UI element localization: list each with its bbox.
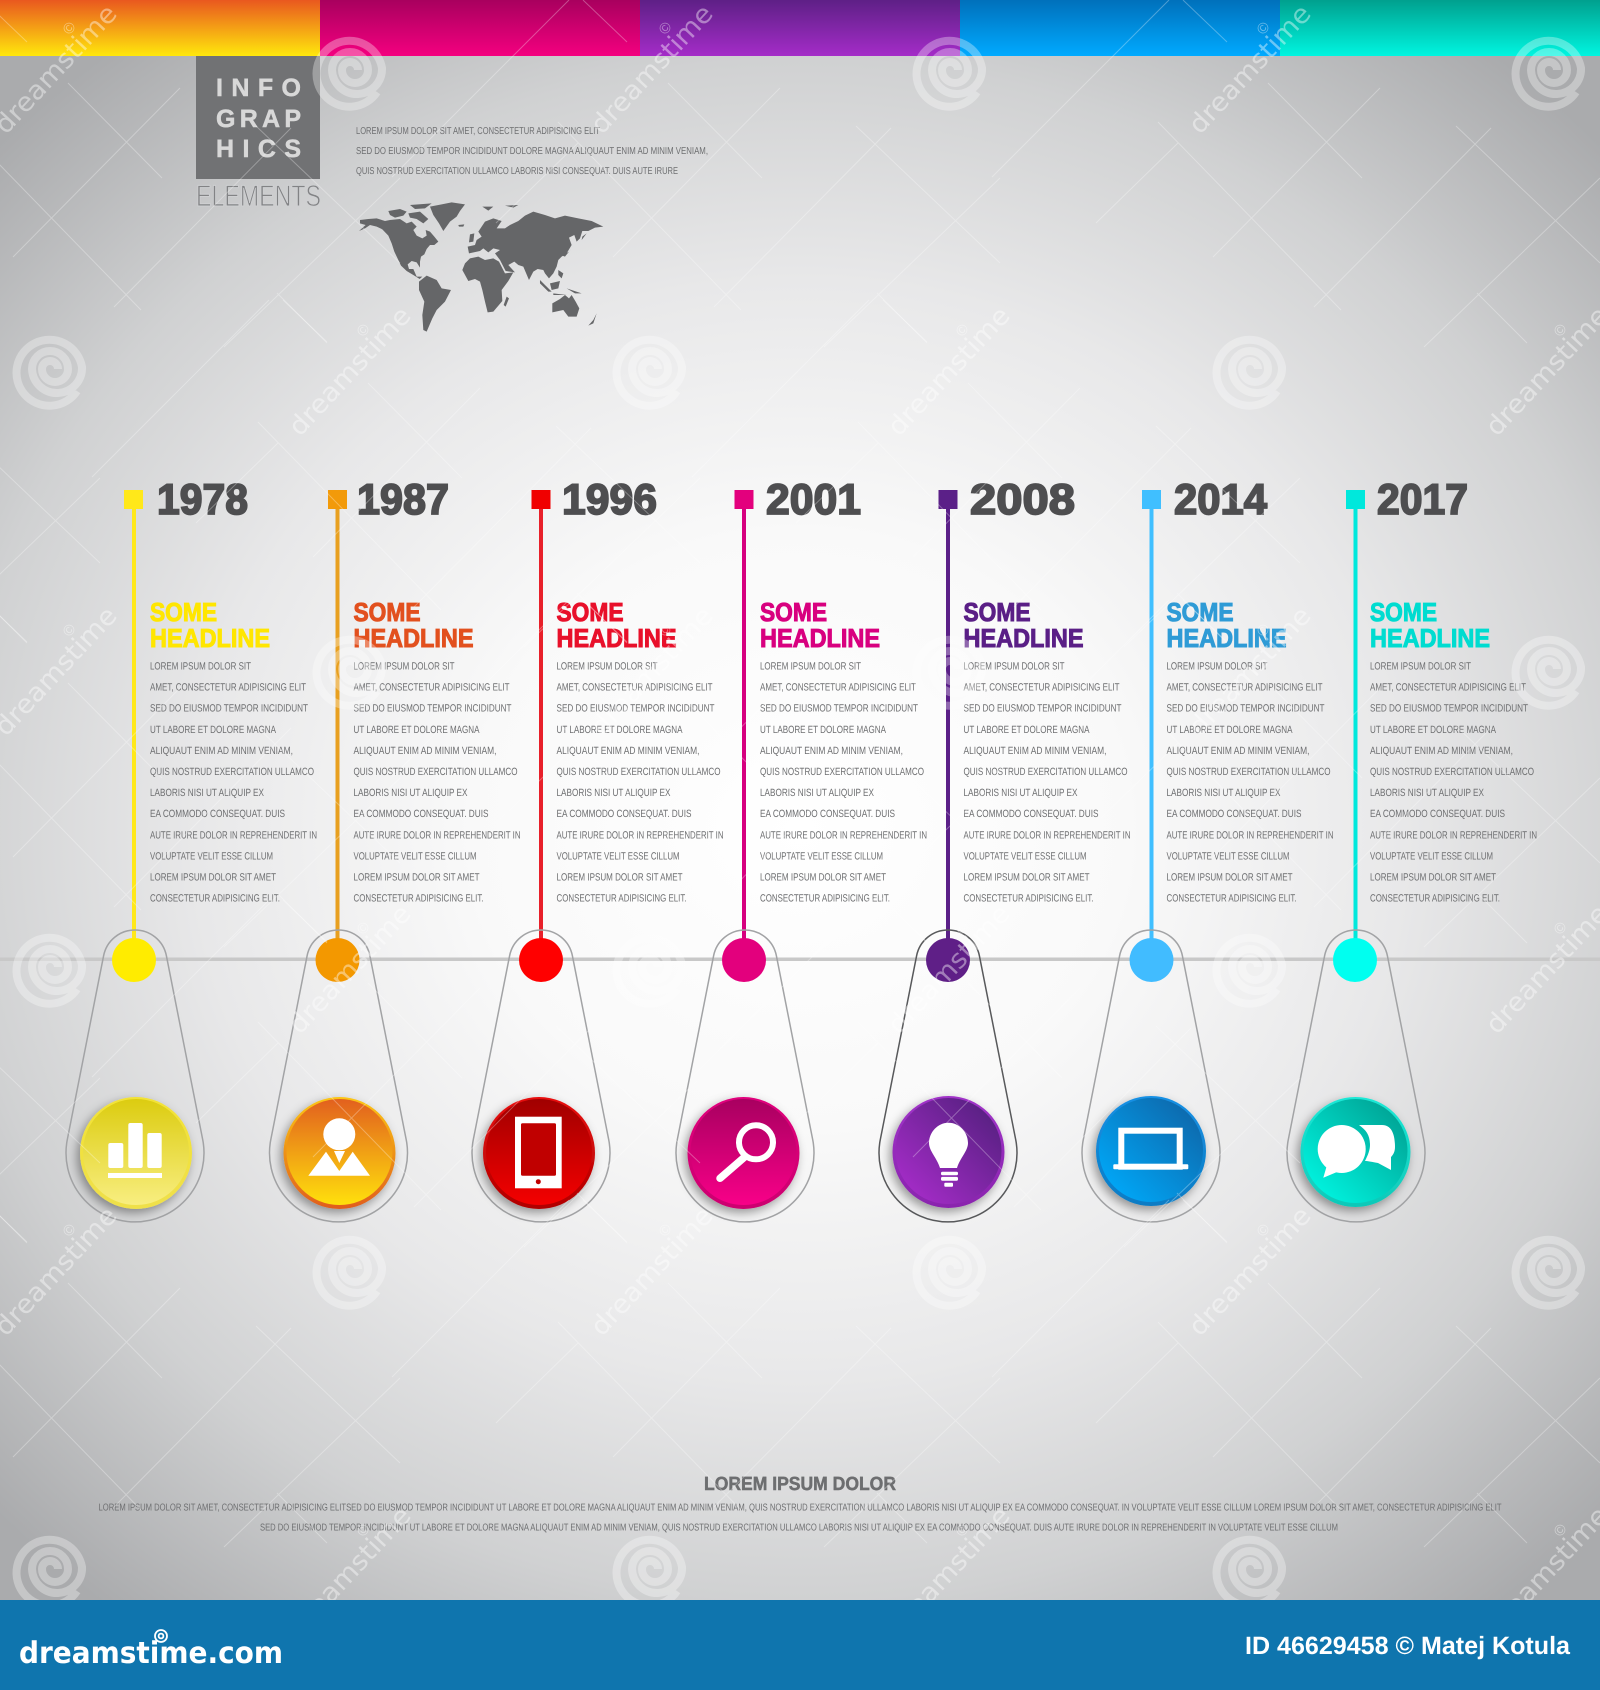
watermark layer: dreamstime xyxy=(283,1501,418,1642)
icon: magnifier xyxy=(720,1125,773,1178)
teardrop outline xyxy=(879,930,1017,1222)
body text: EA COMMODO CONSEQUAT. DUIS xyxy=(150,808,285,820)
timeline dot xyxy=(112,938,156,982)
headline: HEADLINE xyxy=(556,623,676,653)
body text: LABORIS NISI UT ALIQUIP EX xyxy=(1370,787,1484,799)
watermark layer: dreamstime xyxy=(283,899,418,1040)
bottom text block xyxy=(98,1474,1502,1534)
marker and stem xyxy=(938,490,958,941)
footer bar xyxy=(0,1600,1600,1690)
icon: chat bubbles xyxy=(1318,1125,1395,1178)
body text xyxy=(354,660,520,905)
body text: AUTE IRURE DOLOR IN REPREHENDERIT IN xyxy=(354,829,520,841)
watermark layer: © xyxy=(655,1221,675,1240)
marker and stem xyxy=(734,490,754,941)
body text: AMET, CONSECTETUR ADIPISICING ELIT xyxy=(964,682,1120,694)
body text: UT LABORE ET DOLORE MAGNA xyxy=(556,724,682,736)
column: 1987 xyxy=(270,476,520,1222)
watermark layer: © xyxy=(952,321,972,340)
watermark layer: © xyxy=(655,19,675,38)
marker and stem xyxy=(532,490,550,941)
marker and stem xyxy=(1142,490,1161,941)
body text: SED DO EIUSMOD TEMPOR INCIDIDUNT xyxy=(1370,703,1528,715)
button xyxy=(1096,1096,1206,1206)
body text: AUTE IRURE DOLOR IN REPREHENDERIT IN xyxy=(1166,829,1334,841)
marker and stem xyxy=(1346,490,1365,941)
headline: SOME xyxy=(1166,597,1234,627)
body text: UT LABORE ET DOLORE MAGNA xyxy=(150,724,276,736)
body text: ALIQUAUT ENIM AD MINIM VENIAM, xyxy=(1370,745,1513,757)
body text: SED DO EIUSMOD TEMPOR INCIDIDUNT xyxy=(964,703,1122,715)
body text xyxy=(964,660,1130,905)
body text: QUIS NOSTRUD EXERCITATION ULLAMCO xyxy=(760,766,924,778)
body text: UT LABORE ET DOLORE MAGNA xyxy=(1166,724,1292,736)
teardrop outline xyxy=(66,930,204,1222)
body text: EA COMMODO CONSEQUAT. DUIS xyxy=(1370,808,1505,820)
body text: AMET, CONSECTETUR ADIPISICING ELIT xyxy=(354,682,510,694)
body text: AUTE IRURE DOLOR IN REPREHENDERIT IN xyxy=(1370,829,1537,841)
footer bar: dreamstime.com xyxy=(19,1636,283,1671)
headline xyxy=(556,597,676,653)
watermark layer: © xyxy=(1253,19,1273,38)
body text: LOREM IPSUM DOLOR SIT xyxy=(354,660,455,672)
body text: QUIS NOSTRUD EXERCITATION ULLAMCO xyxy=(1370,766,1534,778)
teardrop outline xyxy=(1082,930,1220,1222)
body text: AUTE IRURE DOLOR IN REPREHENDERIT IN xyxy=(760,829,927,841)
body text: LOREM IPSUM DOLOR SIT AMET xyxy=(1370,872,1496,884)
body text: LOREM IPSUM DOLOR SIT AMET xyxy=(760,872,886,884)
body text: VOLUPTATE VELIT ESSE CILLUM xyxy=(1166,850,1290,862)
icon: laptop xyxy=(1113,1131,1188,1169)
body text: QUIS NOSTRUD EXERCITATION ULLAMCO xyxy=(354,766,518,778)
teardrop outline xyxy=(472,930,610,1222)
body text: AUTE IRURE DOLOR IN REPREHENDERIT IN xyxy=(964,829,1130,841)
watermark layer: dreamstime xyxy=(1183,0,1318,140)
teardrop outline xyxy=(270,930,408,1222)
body text: ALIQUAUT ENIM AD MINIM VENIAM, xyxy=(150,745,293,757)
body text: CONSECTETUR ADIPISICING ELIT. xyxy=(964,893,1094,905)
watermark layer: dreamstime xyxy=(585,1201,720,1342)
watermark layer: © xyxy=(1550,919,1570,938)
headline xyxy=(354,597,474,653)
watermark layer: dreamstime xyxy=(882,899,1017,1040)
body text: UT LABORE ET DOLORE MAGNA xyxy=(1370,724,1496,736)
body text: AMET, CONSECTETUR ADIPISICING ELIT xyxy=(150,682,306,694)
watermark layer: © xyxy=(1253,621,1273,640)
body text: ALIQUAUT ENIM AD MINIM VENIAM, xyxy=(1166,745,1310,757)
body text: SED DO EIUSMOD TEMPOR INCIDIDUNT xyxy=(354,703,512,715)
watermark layer: © xyxy=(59,621,79,640)
body text xyxy=(150,660,317,905)
body text: VOLUPTATE VELIT ESSE CILLUM xyxy=(964,850,1086,862)
timeline dot xyxy=(1333,938,1377,982)
timeline dot xyxy=(519,938,563,982)
body text: LOREM IPSUM DOLOR SIT AMET xyxy=(150,872,276,884)
body text: CONSECTETUR ADIPISICING ELIT. xyxy=(150,893,280,905)
world map xyxy=(359,202,603,332)
headline: SOME xyxy=(1370,597,1437,627)
watermark layer: © xyxy=(59,19,79,38)
body text: CONSECTETUR ADIPISICING ELIT. xyxy=(1166,893,1296,905)
year 1987: 1987 xyxy=(357,476,449,524)
headline: HEADLINE xyxy=(354,623,474,653)
timeline dot xyxy=(1130,938,1174,982)
watermark layer: © xyxy=(353,321,373,340)
body text: ALIQUAUT ENIM AD MINIM VENIAM, xyxy=(760,745,903,757)
bottom text block: LOREM IPSUM DOLOR xyxy=(704,1474,896,1495)
body text: LOREM IPSUM DOLOR SIT AMET xyxy=(1166,872,1293,884)
body text: SED DO EIUSMOD TEMPOR INCIDIDUNT xyxy=(1166,703,1325,715)
watermark layer: dreamstime xyxy=(585,601,720,742)
button xyxy=(284,1097,396,1209)
body text: SED DO EIUSMOD TEMPOR INCIDIDUNT xyxy=(760,703,918,715)
column: 1978 xyxy=(66,476,317,1222)
body text: QUIS NOSTRUD EXERCITATION ULLAMCO xyxy=(150,766,314,778)
headline xyxy=(1166,597,1286,653)
body text: LABORIS NISI UT ALIQUIP EX xyxy=(556,787,670,799)
logo: infographics elements: GRAP xyxy=(216,105,301,133)
headline xyxy=(760,597,880,653)
logo: infographics elements xyxy=(196,56,321,213)
icon: person xyxy=(308,1118,370,1176)
watermark layer: dreamstime xyxy=(585,0,720,140)
body text: LOREM IPSUM DOLOR SIT xyxy=(150,660,251,672)
intro text block: LOREM IPSUM DOLOR SIT AMET, CONSECTETUR ADIPISICING ELIT xyxy=(356,126,600,137)
watermark layer: © xyxy=(655,621,675,640)
watermark layer: dreamstime xyxy=(1183,601,1318,742)
column: 2001 xyxy=(676,476,927,1222)
watermark layer: © xyxy=(952,919,972,938)
body text: AUTE IRURE DOLOR IN REPREHENDERIT IN xyxy=(150,829,317,841)
button xyxy=(688,1097,800,1209)
body text: AMET, CONSECTETUR ADIPISICING ELIT xyxy=(1166,682,1323,694)
body text: ALIQUAUT ENIM AD MINIM VENIAM, xyxy=(354,745,496,757)
watermark layer: dreamstime xyxy=(882,1501,1017,1642)
headline: HEADLINE xyxy=(760,623,880,653)
body text xyxy=(556,660,724,905)
headline: HEADLINE xyxy=(1370,623,1490,653)
body text: LOREM IPSUM DOLOR SIT AMET xyxy=(556,872,683,884)
column: 2014 xyxy=(1082,476,1334,1222)
body text: LABORIS NISI UT ALIQUIP EX xyxy=(1166,787,1280,799)
headline: HEADLINE xyxy=(1166,623,1286,653)
teardrop outline xyxy=(676,930,814,1222)
body text: AMET, CONSECTETUR ADIPISICING ELIT xyxy=(1370,682,1526,694)
body text: UT LABORE ET DOLORE MAGNA xyxy=(354,724,480,736)
watermark layer: © xyxy=(952,1521,972,1540)
body text: LABORIS NISI UT ALIQUIP EX xyxy=(150,787,264,799)
marker and stem xyxy=(124,490,143,941)
body text xyxy=(1370,660,1537,905)
body text: AMET, CONSECTETUR ADIPISICING ELIT xyxy=(760,682,916,694)
column: 1996 xyxy=(472,476,724,1222)
body text: QUIS NOSTRUD EXERCITATION ULLAMCO xyxy=(556,766,720,778)
timeline dot xyxy=(316,938,360,982)
icon: bar chart xyxy=(108,1123,162,1178)
body text: VOLUPTATE VELIT ESSE CILLUM xyxy=(354,850,476,862)
button xyxy=(892,1096,1004,1208)
body text: VOLUPTATE VELIT ESSE CILLUM xyxy=(150,850,273,862)
timeline dot xyxy=(926,938,970,982)
footer bar: ID 46629458 © Matej Kotula xyxy=(1245,1632,1571,1660)
body text: EA COMMODO CONSEQUAT. DUIS xyxy=(964,808,1098,820)
body text xyxy=(760,660,927,905)
body text: QUIS NOSTRUD EXERCITATION ULLAMCO xyxy=(1166,766,1330,778)
body text: LOREM IPSUM DOLOR SIT xyxy=(1370,660,1471,672)
body text: ALIQUAUT ENIM AD MINIM VENIAM, xyxy=(556,745,700,757)
headline: SOME xyxy=(354,597,420,627)
year 2001: 2001 xyxy=(766,476,861,524)
body text: CONSECTETUR ADIPISICING ELIT. xyxy=(1370,893,1500,905)
watermark layer: © xyxy=(59,1221,79,1240)
headline xyxy=(150,597,270,653)
intro text block: SED DO EIUSMOD TEMPOR INCIDIDUNT DOLORE MAGNA ALIQUAUT ENIM AD MINIM VENIAM, xyxy=(356,146,708,157)
body text: QUIS NOSTRUD EXERCITATION ULLAMCO xyxy=(964,766,1128,778)
body text: LOREM IPSUM DOLOR SIT xyxy=(1166,660,1268,672)
intro text block: QUIS NOSTRUD EXERCITATION ULLAMCO LABORIS NISI CONSEQUAT. DUIS AUTE IRURE xyxy=(356,166,678,177)
body text: LOREM IPSUM DOLOR SIT xyxy=(760,660,861,672)
body text: LABORIS NISI UT ALIQUIP EX xyxy=(964,787,1078,799)
headline: SOME xyxy=(556,597,624,627)
marker and stem xyxy=(328,490,347,941)
body text: LOREM IPSUM DOLOR SIT AMET xyxy=(964,872,1090,884)
headline xyxy=(1370,597,1490,653)
body text: LOREM IPSUM DOLOR SIT xyxy=(556,660,658,672)
button xyxy=(80,1097,192,1209)
body text: VOLUPTATE VELIT ESSE CILLUM xyxy=(556,850,680,862)
body text: UT LABORE ET DOLORE MAGNA xyxy=(964,724,1090,736)
year 2014: 2014 xyxy=(1174,476,1267,524)
watermark layer: © xyxy=(353,919,373,938)
top colour band xyxy=(0,0,1600,56)
year 2017: 2017 xyxy=(1377,476,1468,524)
year 2008: 2008 xyxy=(970,476,1075,524)
body text xyxy=(1166,660,1334,905)
body text: CONSECTETUR ADIPISICING ELIT. xyxy=(760,893,890,905)
headline xyxy=(964,597,1084,653)
body text: LOREM IPSUM DOLOR SIT xyxy=(964,660,1065,672)
timeline dot xyxy=(722,938,766,982)
year 1978: 1978 xyxy=(157,476,248,524)
watermark layer: dreamstime xyxy=(283,301,418,442)
icon: tablet xyxy=(515,1117,562,1188)
body text: LABORIS NISI UT ALIQUIP EX xyxy=(760,787,874,799)
body text: AMET, CONSECTETUR ADIPISICING ELIT xyxy=(556,682,713,694)
logo: infographics elements: INFO xyxy=(216,74,301,102)
body text: VOLUPTATE VELIT ESSE CILLUM xyxy=(760,850,883,862)
headline: SOME xyxy=(964,597,1030,627)
body text: UT LABORE ET DOLORE MAGNA xyxy=(760,724,886,736)
body text: AUTE IRURE DOLOR IN REPREHENDERIT IN xyxy=(556,829,724,841)
body text: EA COMMODO CONSEQUAT. DUIS xyxy=(760,808,895,820)
column: 2008 xyxy=(879,476,1130,1222)
body text: CONSECTETUR ADIPISICING ELIT. xyxy=(354,893,484,905)
headline: HEADLINE xyxy=(150,623,270,653)
year 1996: 1996 xyxy=(562,476,657,524)
body text: SED DO EIUSMOD TEMPOR INCIDIDUNT xyxy=(150,703,308,715)
body text: VOLUPTATE VELIT ESSE CILLUM xyxy=(1370,850,1493,862)
body text: EA COMMODO CONSEQUAT. DUIS xyxy=(556,808,692,820)
watermark layer: © xyxy=(1550,1521,1570,1540)
body text: EA COMMODO CONSEQUAT. DUIS xyxy=(354,808,488,820)
watermark layer: dreamstime xyxy=(882,301,1017,442)
body text: SED DO EIUSMOD TEMPOR INCIDIDUNT xyxy=(556,703,715,715)
logo: infographics elements: ELEMENTS xyxy=(196,180,321,213)
logo: infographics elements: HICS xyxy=(216,135,301,163)
headline: SOME xyxy=(150,597,217,627)
button xyxy=(1300,1097,1410,1207)
watermark layer: © xyxy=(353,1521,373,1540)
body text: ALIQUAUT ENIM AD MINIM VENIAM, xyxy=(964,745,1106,757)
body text: EA COMMODO CONSEQUAT. DUIS xyxy=(1166,808,1302,820)
headline: HEADLINE xyxy=(964,623,1084,653)
watermark layer: dreamstime xyxy=(1183,1201,1318,1342)
teardrop outline xyxy=(1287,930,1425,1222)
body text: CONSECTETUR ADIPISICING ELIT. xyxy=(556,893,686,905)
body text: LOREM IPSUM DOLOR SIT AMET xyxy=(354,872,480,884)
headline: SOME xyxy=(760,597,827,627)
intro text block xyxy=(356,126,708,177)
column: 2017 xyxy=(1287,476,1537,1222)
icon: light bulb xyxy=(929,1123,968,1187)
watermark layer: © xyxy=(1253,1221,1273,1240)
timeline axis xyxy=(0,958,1600,961)
watermark layer: © xyxy=(1550,321,1570,340)
body text: LABORIS NISI UT ALIQUIP EX xyxy=(354,787,468,799)
button xyxy=(483,1097,595,1209)
